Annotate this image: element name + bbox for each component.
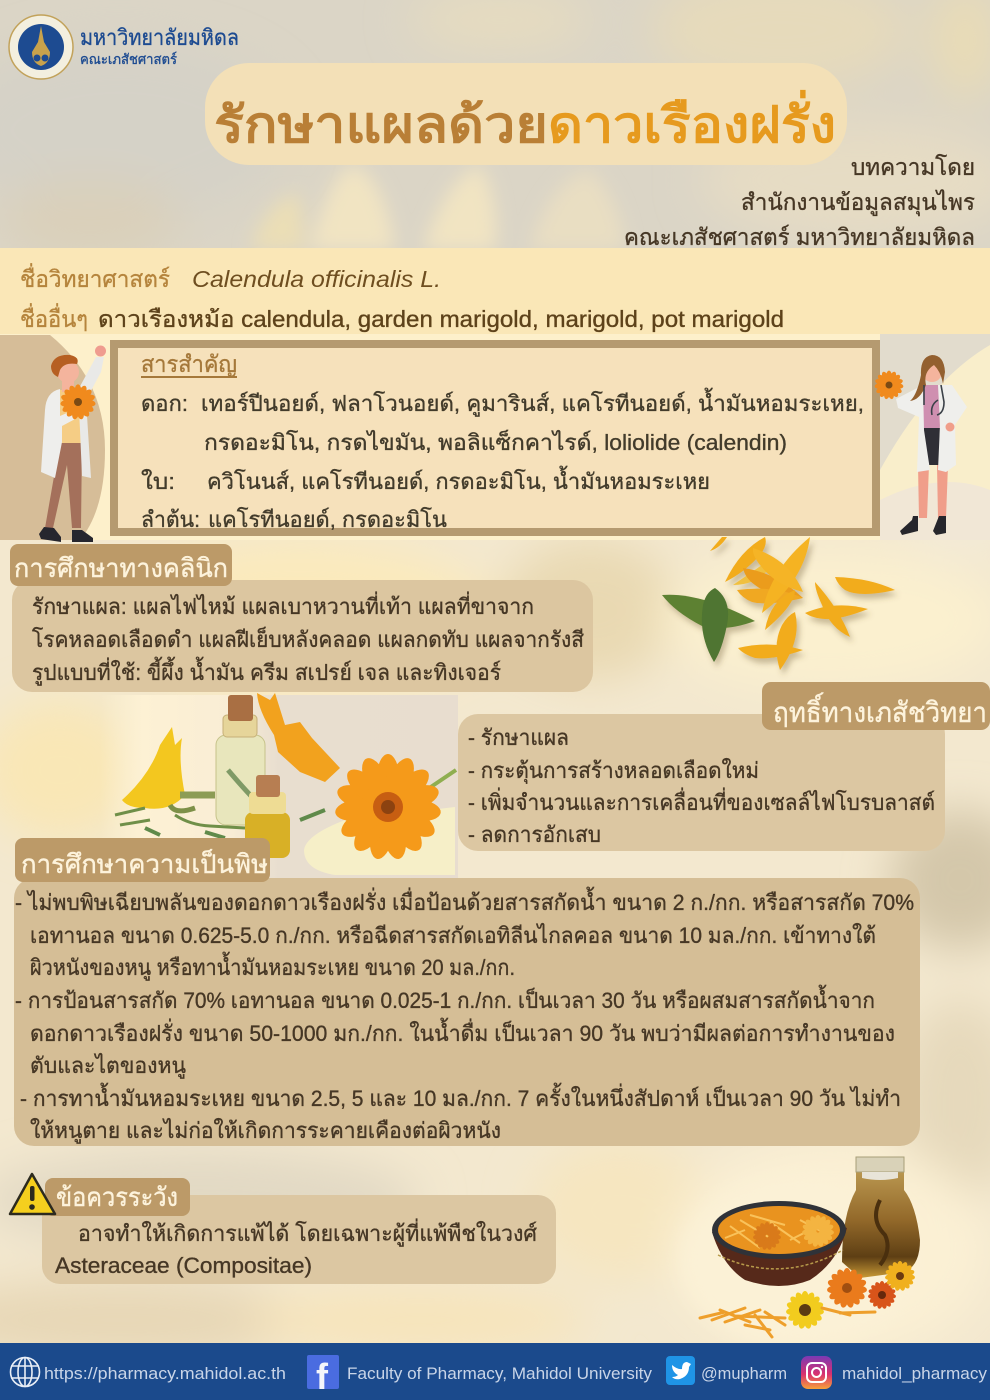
panel: names band: ชื่ออื่นๆ — [20, 303, 88, 332]
footer bar: mahidol_pharmacy — [842, 1364, 987, 1383]
logo text — [80, 25, 239, 67]
photo: dried petals bowl and oil flask — [680, 1157, 920, 1345]
panel: clinical studies: รักษาแผล: แผลไฟไหม้ แผลเบาหวานที่เท้า แผลที่ขาจาก — [32, 591, 534, 619]
panel: pharmacological activities: - ลดการอักเสบ — [468, 822, 601, 847]
icon: globe — [10, 1358, 40, 1386]
icon: facebook: f — [316, 1356, 329, 1397]
heading: clinical studies: การศึกษาทางคลินิก — [14, 553, 228, 583]
heading: clinical studies — [10, 544, 232, 586]
panel: precautions — [42, 1195, 556, 1284]
byline — [624, 154, 975, 250]
panel: toxicity studies — [14, 878, 920, 1146]
panel: precautions: อาจทำให้เกิดการแพ้ได้ โดยเฉพาะผู้ที่แพ้พืชในวงศ์ — [78, 1218, 537, 1247]
panel: names band: ชื่อวิทยาศาสตร์ — [20, 263, 170, 292]
logo text: คณะเภสัชศาสตร์ — [80, 51, 177, 67]
byline: สำนักงานข้อมูลสมุนไพร — [741, 189, 975, 216]
photo: oil bottles with calendula — [100, 693, 458, 879]
panel: key constituents: ใบ: — [141, 469, 175, 494]
heading: precautions: ข้อควรระวัง — [56, 1182, 178, 1212]
panel: toxicity studies: เอทานอล ขนาด 0.625-5.0 ก./กก. หรือฉีดสารสกัดเอทิลีนไกลคอล ขนาด 10 มล./กก. เข้าทางใต้ — [30, 923, 876, 948]
panel: key constituents: ควิโนนส์, แคโรทีนอยด์, กรดอะมิโน, น้ำมันหอมระเหย — [207, 466, 710, 494]
icon: female doctor with flower — [874, 355, 967, 535]
panel: names band: Calendula officinalis L. — [192, 266, 441, 292]
byline: คณะเภสัชศาสตร์ มหาวิทยาลัยมหิดล — [624, 224, 975, 250]
panel: precautions: Asteraceae (Compositae) — [55, 1253, 312, 1278]
panel: pharmacological activities — [458, 714, 945, 851]
icon: facebook — [307, 1355, 339, 1397]
panel: key constituents: ลำต้น: — [141, 507, 200, 532]
panel: key constituents: ดอก: — [141, 391, 188, 416]
logo text: มหาวิทยาลัยมหิดล — [80, 25, 239, 50]
icon: scattered petals and leaves — [662, 537, 895, 670]
panel: toxicity studies: ให้หนูตาย และไม่ก่อให้เกิดการระคายเคืองต่อผิวหนัง — [30, 1118, 501, 1144]
panel: pharmacological activities: - กระตุ้นการสร้างหลอดเลือดใหม่ — [468, 758, 759, 784]
heading: pharmacological activities — [762, 682, 990, 730]
panel: clinical studies: โรคหลอดเลือดดำ แผลฝีเย็บหลังคลอด แผลกดทับ แผลจากรังสี — [32, 625, 585, 652]
panel: key constituents: เทอร์ปีนอยด์, ฟลาโวนอยด์, คูมารินส์, แคโรทีนอยด์, น้ำมันหอมระเหย, — [201, 388, 864, 417]
panel: toxicity studies: ผิวหนังของหนู หรือทาน้ำมันหอมระเหย ขนาด 20 มล./กก. — [30, 952, 515, 981]
title pill: รักษาแผลด้วย — [214, 97, 548, 153]
panel: names band — [0, 248, 990, 334]
icon: twitter — [666, 1356, 695, 1385]
icon: warning triangle — [10, 1174, 55, 1214]
title pill — [205, 63, 847, 165]
panel: key constituents — [114, 344, 876, 532]
panel: names band: ดาวเรืองหม้อ calendula, garden marigold, marigold, pot marigold — [98, 306, 784, 332]
panel: toxicity studies: - ไม่พบพิษเฉียบพลันของดอกดาวเรืองฝรั่ง เมื่อป้อนด้วยสารสกัดน้ำ ขนาด 2 ก./กก. หรือสารสกัด 70% — [15, 887, 914, 915]
panel: toxicity studies: ตับและไตของหนู — [30, 1053, 186, 1079]
icon: instagram — [801, 1356, 832, 1389]
icon: male pharmacist with flower — [39, 346, 106, 542]
footer bar: @mupharm — [701, 1364, 787, 1383]
panel: key constituents: แคโรทีนอยด์, กรดอะมิโน — [208, 507, 447, 532]
footer bar: https://pharmacy.mahidol.ac.th — [44, 1364, 286, 1383]
panel: pharmacological activities: - รักษาแผล — [468, 725, 569, 750]
panel: toxicity studies: ดอกดาวเรืองฝรั่ง ขนาด 50-1000 มก./กก. ในน้ำดื่ม เป็นเวลา 90 วัน พบว่ามีผลต่อการทำงานของ — [30, 1018, 895, 1046]
panel: pharmacological activities: - เพิ่มจำนวนและการเคลื่อนที่ของเซลล์ไฟโบรบลาสต์ — [468, 787, 935, 815]
panel: clinical studies — [12, 580, 593, 692]
panel: key constituents: กรดอะมิโน, กรดไขมัน, พอลิแซ็กคาไรด์, loliolide (calendin) — [204, 428, 787, 455]
panel: toxicity studies: - การทาน้ำมันหอมระเหย ขนาด 2.5, 5 และ 10 มล./กก. 7 ครั้งในหนึ่งสัปดาห์ เป็นเวลา 90 วัน ไม่ทำ — [20, 1083, 901, 1111]
panel: toxicity studies: - การป้อนสารสกัด 70% เอทานอล ขนาด 0.025-1 ก./กก. เป็นเวลา 30 วัน หรือผสมสารสกัดน้ำจาก — [15, 985, 875, 1013]
heading: toxicity studies: การศึกษาความเป็นพิษ — [21, 848, 268, 879]
title pill: ดาวเรืองฝรั่ง — [548, 90, 836, 153]
footer bar: Faculty of Pharmacy, Mahidol University — [347, 1364, 652, 1383]
panel: clinical studies: รูปแบบที่ใช้: ขี้ผึ้ง น้ำมัน ครีม สเปรย์ เจล และทิงเจอร์ — [32, 657, 501, 686]
logo: Mahidol University seal — [9, 15, 73, 79]
panel: key constituents: สารสำคัญ — [141, 351, 237, 377]
footer bar — [0, 1343, 990, 1400]
heading: toxicity studies — [15, 838, 270, 882]
byline: บทความโดย — [851, 154, 975, 180]
